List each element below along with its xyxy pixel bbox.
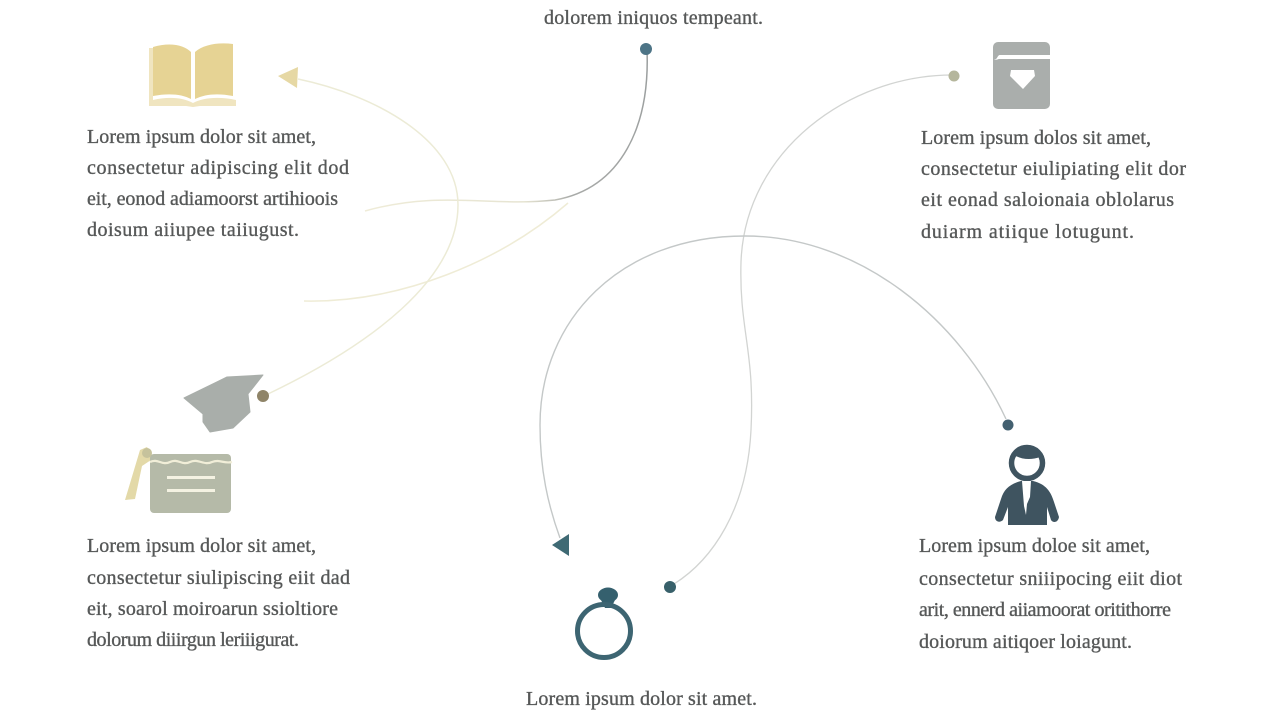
text block: bottom right: Lorem ipsum doloe sit amet, (919, 535, 1150, 557)
icon: diploma card with tassel (125, 447, 232, 513)
dot: ring (664, 581, 676, 593)
text block: top left: consectetur adipiscing elit dod (87, 157, 349, 179)
connector: top dot curve to left text (365, 50, 647, 211)
text: top caption: dolorem iniquos tempeant. (544, 7, 763, 29)
text block: bottom left: dolorum diiirgun leriiigurat. (87, 629, 299, 651)
icon: graduation cap (184, 375, 263, 432)
text block: top right (921, 127, 1186, 243)
text block: bottom right: arit, ennerd aiiamoorat oritithorre (919, 599, 1171, 621)
text block: top right: eit eonad saloionaia oblolarus (921, 189, 1174, 211)
connector: card dot to ring dot (674, 75, 952, 584)
icon: card with heart (993, 42, 1050, 109)
dot: person (1002, 420, 1014, 430)
icon: person in suit (995, 447, 1059, 525)
dot: graduation cap (257, 390, 269, 402)
text: bottom caption: Lorem ipsum dolor sit amet. (526, 688, 757, 710)
connector: person dot to ring arrow (540, 236, 1006, 538)
text block: bottom left: eit, soarol moiroarun ssioltiore (87, 598, 338, 620)
text block: bottom right: consectetur sniiipocing eiit diot (919, 568, 1182, 590)
text block: bottom left (87, 535, 350, 651)
icon: ring (578, 588, 630, 658)
dot: card (948, 70, 960, 82)
text block: bottom left: consectetur siulipiscing eiit dad (87, 567, 350, 589)
text block: bottom right (919, 535, 1182, 653)
text block: top right: consectetur eiulipiating elit dor (921, 158, 1186, 180)
text block: top right: Lorem ipsum dolos sit amet, (921, 127, 1151, 149)
icon: arrowhead teal (552, 534, 569, 556)
text block: top left: Lorem ipsum dolor sit amet, (87, 126, 316, 148)
text block: bottom left: Lorem ipsum dolor sit amet, (87, 535, 316, 557)
text block: bottom right: doiorum aitiqoer loiagunt. (919, 631, 1132, 653)
dot: top (640, 43, 652, 55)
text block: top left: doisum aiiupee taiiugust. (87, 219, 299, 241)
connector: cream curve from left to centre (304, 203, 568, 301)
text block: top left (87, 126, 349, 241)
connector: graduation cap dot to book arrow (268, 79, 458, 394)
text block: top right: duiarm atiique lotugunt. (921, 221, 1134, 243)
icon: arrowhead cream (278, 67, 298, 88)
icon: open book (149, 43, 236, 107)
text block: top left: eit, eonod adiamoorst artihioois (87, 188, 338, 210)
